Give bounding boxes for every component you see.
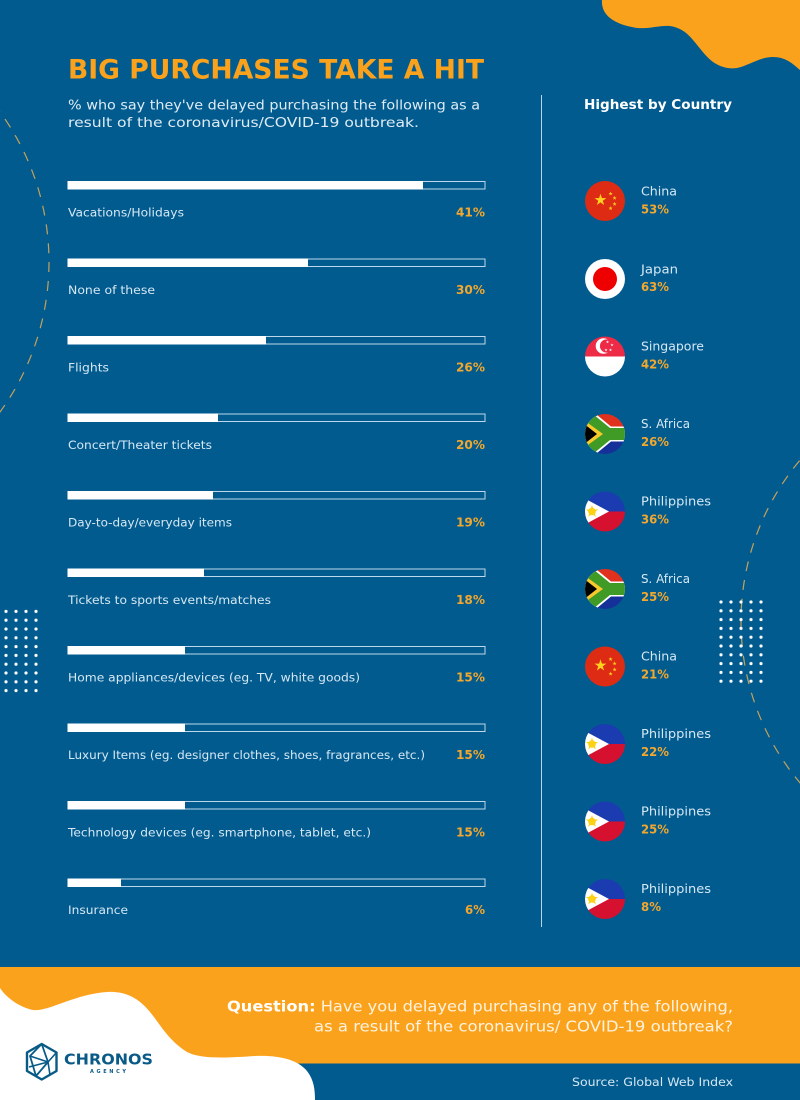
row: Technology devices 15% [67,801,485,840]
country: Philippines 25% [581,798,711,846]
country: China 21% [585,646,677,686]
decorative dashed arc: right [741,372,800,872]
country: Philippines 36%: Philippines [641,494,711,508]
logo: Chronos Agency [27,1044,153,1080]
row: None of these 30% [68,258,485,297]
country: Japan 63%: Japan [640,262,678,276]
row: Insurance 6%: Insurance [68,903,128,917]
country: China 53% [585,181,677,221]
decorative dot grid: right [716,598,766,686]
row: Day-to-day/everyday items 19% [68,491,485,530]
row: Vacations/Holidays 41%: 41% [456,206,485,220]
country: Philippines 36%: 36% [641,512,669,526]
country: S. Africa 26%: S. Africa [641,417,690,431]
row: Day-to-day/everyday items 19%: 19% [456,516,485,530]
country: China 21%: China [641,650,677,664]
country: S. Africa 25% [581,565,690,613]
country: China 21%: 21% [641,668,669,682]
subtitle: % who say they've delayed purchasing the following as a [68,98,480,114]
row: Day-to-day/everyday items 19%: Day-to-day/everyday items [68,516,232,530]
country: S. Africa 26%: 26% [641,435,669,449]
decorative orange blob: top right [602,0,800,70]
row: Tickets to sports events/matches 18% [67,568,485,607]
country: S. Africa 25%: S. Africa [641,572,690,586]
country: Philippines 36% [581,488,711,536]
decorative dashed arc: left [0,8,49,516]
decorative dot grid: left [2,607,42,695]
row: Luxury Items 15% [68,724,485,762]
source: Source: Global Web Index [572,1075,733,1089]
country: Philippines 8% [581,875,711,923]
row: Luxury Items 15%: Luxury Items (eg. designer clothes, shoes, fragrances, etc.) [68,748,425,762]
country: S. Africa 26% [581,410,690,458]
country: Philippines 8%: Philippines [641,882,711,896]
footer white blob [0,988,315,1100]
country: Philippines 22% [581,720,711,768]
divider [540,95,542,927]
row: Home appliances/devices 15%: 15% [456,670,485,684]
row: Home appliances/devices 15%: Home appliances/devices (eg. TV, white goods) [68,670,360,684]
row: Luxury Items 15%: 15% [456,748,485,762]
row: Vacations/Holidays 41% [68,181,485,220]
country: China 53%: China [641,184,677,198]
heading: highest by country: Highest by Country [584,97,732,113]
country: Singapore 42% [585,336,704,376]
footer orange band [0,967,800,1064]
row: Tickets to sports events/matches 18%: 18% [456,593,485,607]
row: None of these 30%: None of these [68,283,155,297]
row: Flights 26% [68,336,485,374]
question text [227,998,733,1036]
icon: hexagon polyhedron [27,1044,56,1080]
row: Flights 26%: Flights [68,360,109,374]
country: Philippines 8%: 8% [641,900,661,914]
country: Philippines 25%: 25% [641,822,669,836]
row: Home appliances/devices 15% [68,646,485,684]
row: Vacations/Holidays 41%: Vacations/Holidays [68,206,184,220]
country: Philippines 22%: Philippines [641,727,711,741]
row: Concert/Theater tickets 20%: 20% [456,438,485,452]
question text: as a result of the coronavirus/ COVID-19 outbreak? [314,1018,733,1036]
title: BIG PURCHASES TAKE A HIT [68,54,485,86]
country: Singapore 42%: 42% [641,358,669,372]
row: Technology devices 15%: Technology devices (eg. smartphone, tablet, etc.) [67,826,371,840]
row: Insurance 6%: 6% [465,903,485,917]
row: None of these 30%: 30% [456,283,485,297]
row: Tickets to sports events/matches 18%: Tickets to sports events/matches [67,593,271,607]
panel: highest by country list [581,181,711,923]
logo wordmark: CHRONOS [64,1050,153,1068]
row: Insurance 6% [68,878,485,917]
question text: Question: Have you delayed purchasing any of the following, [227,998,733,1016]
row: Technology devices 15%: 15% [456,826,485,840]
logo subtext: AGENCY [90,1069,126,1075]
subtitle: result of the coronavirus/COVID-19 outbreak. [68,115,419,131]
row: Flights 26%: 26% [456,360,485,374]
country: Philippines 25%: Philippines [641,804,711,818]
subtitle [68,98,480,131]
row: Concert/Theater tickets 20%: Concert/Theater tickets [68,438,212,452]
country: China 53%: 53% [641,202,669,216]
country: S. Africa 25%: 25% [641,590,669,604]
country: Japan 63% [585,259,678,299]
bar chart: delayed purchases [67,181,485,917]
country: Philippines 22%: 22% [641,745,669,759]
row: Concert/Theater tickets 20% [68,414,485,452]
country: Japan 63%: 63% [641,280,669,294]
country: Singapore 42%: Singapore [641,340,704,354]
